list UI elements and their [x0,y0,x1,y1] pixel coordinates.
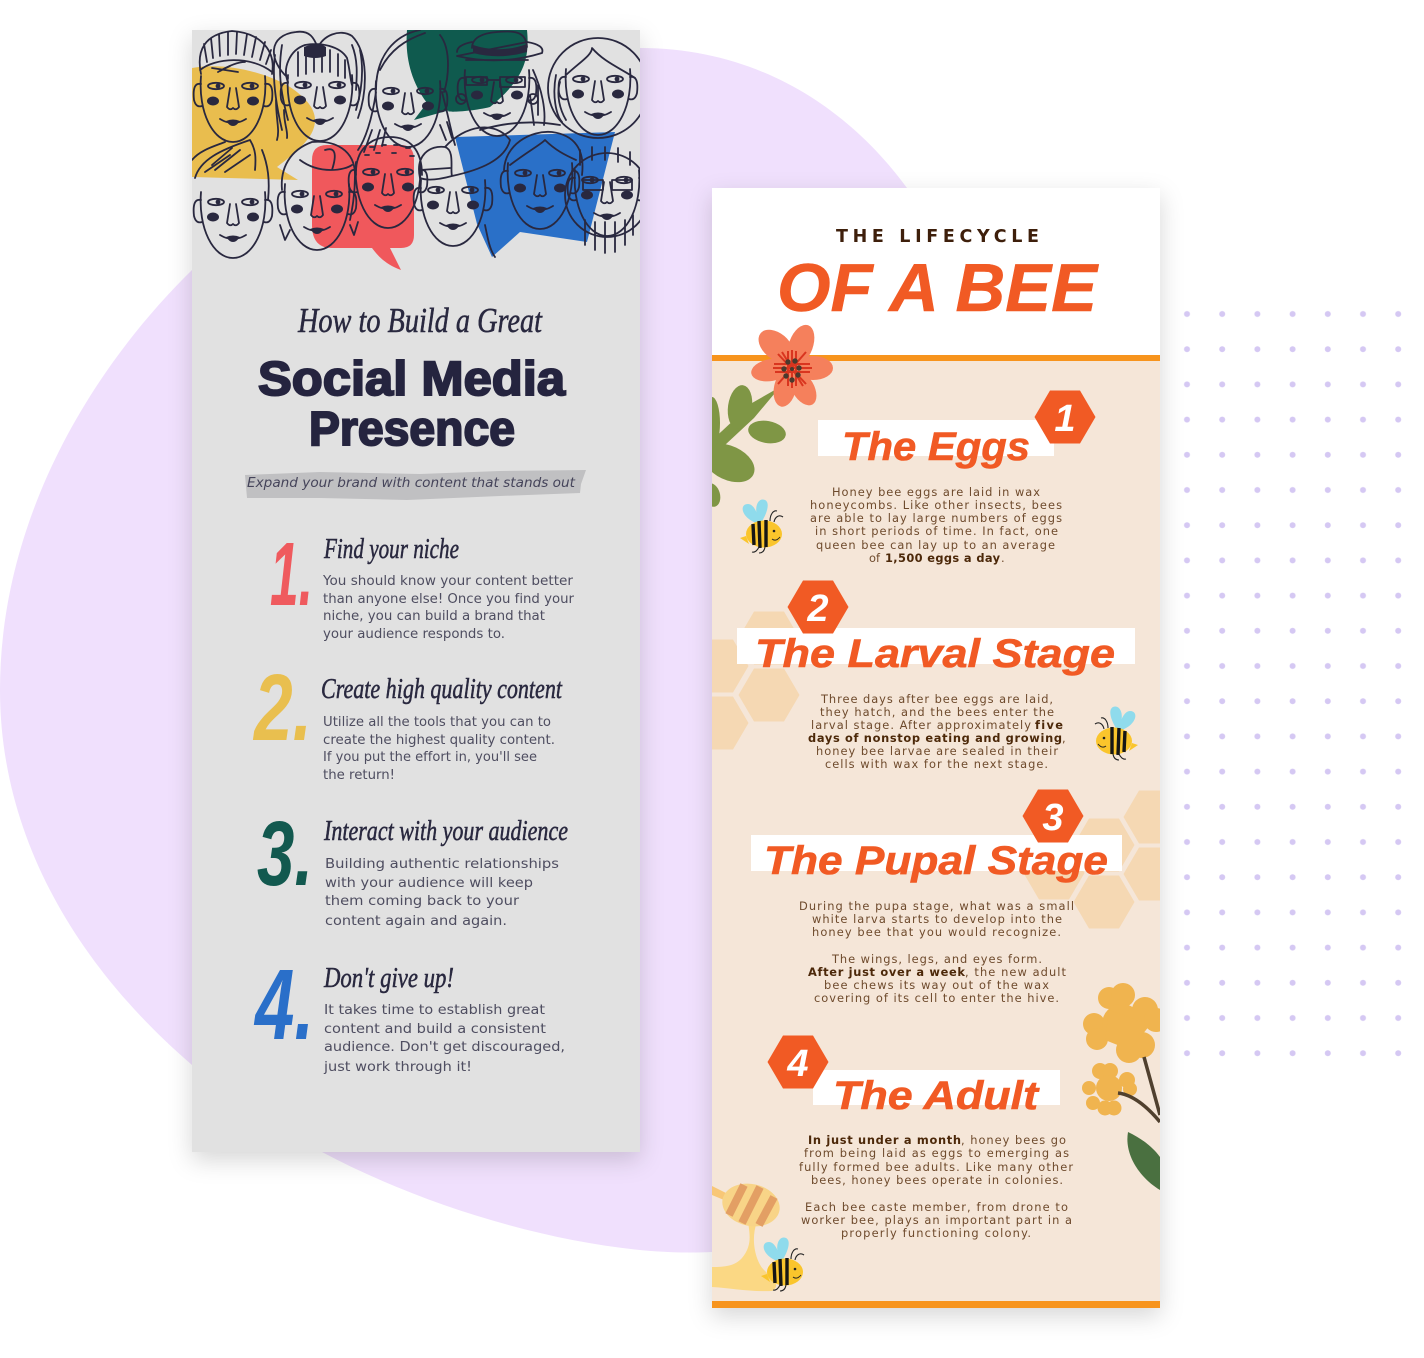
body text [323,1003,565,1075]
panel: lifecycle of a bee [688,188,1184,1308]
body text: days of nonstop eating and growing [808,731,1062,745]
icon: bee near eggs [740,500,783,553]
body text: in short periods of time. In fact, one [815,524,1058,538]
panel: social media presence [192,30,649,1152]
body text: Each bee caste member, from drone to [805,1200,1068,1214]
dot grid pattern [1180,306,1404,1062]
body text: the return! [323,768,395,783]
body text [810,485,1062,565]
title: Social Media Presence: Presence [309,403,515,456]
body text: 1,500 eggs a day [885,551,1001,565]
title: the lifecycle: THE LIFECYCLE [836,227,1039,247]
badge 3: 3 [1042,797,1064,839]
badge 1: 1 [1054,398,1076,440]
section 2: the larval stage [737,580,1135,771]
body text: , the new adult [965,965,1067,979]
step 4 [254,949,565,1075]
icon: bee near larval [1095,707,1138,760]
body text: If you put the effort in, you'll see [323,750,537,765]
number 3: 3. [257,803,313,905]
tagline with grey brush stroke: Expand your brand with content that stands out [247,476,576,491]
badge 2 [788,580,848,634]
heading text: The Pupal Stage [764,839,1108,883]
heading text: The Eggs [842,425,1030,469]
body text: queen bee can lay up to an average [816,538,1055,552]
yellow speech bubble [192,66,315,180]
body text: they hatch, and the bees enter the [820,705,1054,719]
body text [322,574,575,642]
body text: properly functioning colony. [841,1226,1031,1240]
body text: with your audience will keep [325,876,533,891]
body text: You should know your content better [322,574,574,589]
badge 2: 2 [806,588,829,630]
heading band [737,628,1135,664]
body text: In just under a month [808,1133,961,1147]
body text: Three days after bee eggs are laid, [820,692,1053,706]
body text: During the pupa stage, what was a small [799,899,1074,913]
number 1: 1. [270,525,313,625]
body text: honey bee larvae are sealed in their [816,744,1058,758]
body text: worker bee, plays an important part in a [801,1213,1072,1227]
subtitle script: How to Build a Great: How to Build a Great [297,301,543,340]
heading band [818,420,1054,456]
heading band [751,835,1122,871]
body text: your audience responds to. [323,627,505,642]
body text: , [1062,731,1066,745]
body text: , honey bees go [961,1133,1066,1147]
icon: flower stems [1118,1057,1160,1122]
illustration: crowd of faces with speech bubbles [192,30,649,270]
heading text: The Larval Stage [755,632,1115,676]
number 4: 4. [254,949,314,1061]
green speech bubble [407,30,528,120]
heading text: The Adult [833,1074,1040,1118]
body text: Utilize all the tools that you can to [323,715,551,730]
section 1: the eggs [810,390,1096,565]
heading: Don't give up! [323,963,454,994]
body text: covering of its cell to enter the hive. [814,991,1059,1005]
faces [192,30,649,258]
section 3: the pupal stage [751,790,1122,1005]
body text: niche, you can build a brand that [323,609,545,624]
body text [325,857,559,929]
heading band [813,1070,1060,1105]
body text: audience. Don't get discouraged, [324,1040,565,1055]
icon: green leaves stem [712,385,786,507]
honeycomb cells right [1024,790,1160,928]
body text: larval stage. After approximately [811,718,1031,732]
step 2 [253,655,563,783]
heading: Create high quality content [321,674,563,705]
honeycomb cells left [712,612,800,750]
body text: . [1001,551,1005,565]
body text: The wings, legs, and eyes form. [831,952,1042,966]
body text [323,715,555,783]
body text: cells with wax for the next stage. [825,757,1048,771]
body text: honey bee that you would recognize. [812,925,1061,939]
body text: honeycombs. Like other insects, bees [810,498,1062,512]
body text: create the highest quality content. [323,733,555,748]
heading: Interact with your audience [323,816,568,847]
icon: orange flowers [1082,983,1168,1116]
red speech bubble [312,145,414,270]
icon: bee near honey [761,1238,804,1291]
badge 3 [1022,790,1084,842]
heading: Find your niche [323,534,459,565]
background lavender blob [0,48,1000,1253]
body text: fully formed bee adults. Like many other [799,1160,1073,1174]
tagline with grey brush stroke [245,470,586,500]
body text [799,1133,1073,1240]
step 3 [257,803,568,929]
title: of a bee: OF A BEE [777,250,1100,326]
body text: from being laid as eggs to emerging as [804,1146,1069,1160]
body text: After just over a week [808,965,965,979]
title: Social Media Presence [258,353,565,456]
body text: It takes time to establish great [324,1003,545,1018]
body text: content again and again. [325,914,507,929]
body text: five [1035,718,1063,732]
icon: honey dipper [712,1178,784,1291]
icon: red flower [749,321,833,410]
body text: bee chews its way out of the wax [824,978,1049,992]
body text: are able to lay large numbers of eggs [810,511,1062,525]
body text [799,899,1074,1005]
body text: just work through it! [323,1060,472,1075]
step 1 [270,525,575,642]
badge 1 [1034,390,1096,444]
title: Social Media Presence: Social Media [258,353,565,406]
badge 4 [768,1036,828,1088]
body text: Building authentic relationships [325,857,559,872]
number 2: 2. [253,655,312,761]
body text: them coming back to your [325,894,520,909]
body text: than anyone else! Once you find your [323,592,575,607]
blue speech bubble [455,132,615,257]
body text: bees, honey bees operate in colonies. [811,1173,1063,1187]
body text: Honey bee eggs are laid in wax [832,485,1040,499]
body text: content and build a consistent [324,1022,546,1037]
badge 4: 4 [786,1043,809,1085]
body text [808,692,1066,771]
body text: of [869,551,881,565]
icon: green leaf [1127,1132,1160,1190]
section 4: the adult [768,1036,1073,1240]
body text: white larva starts to develop into the [812,912,1062,926]
